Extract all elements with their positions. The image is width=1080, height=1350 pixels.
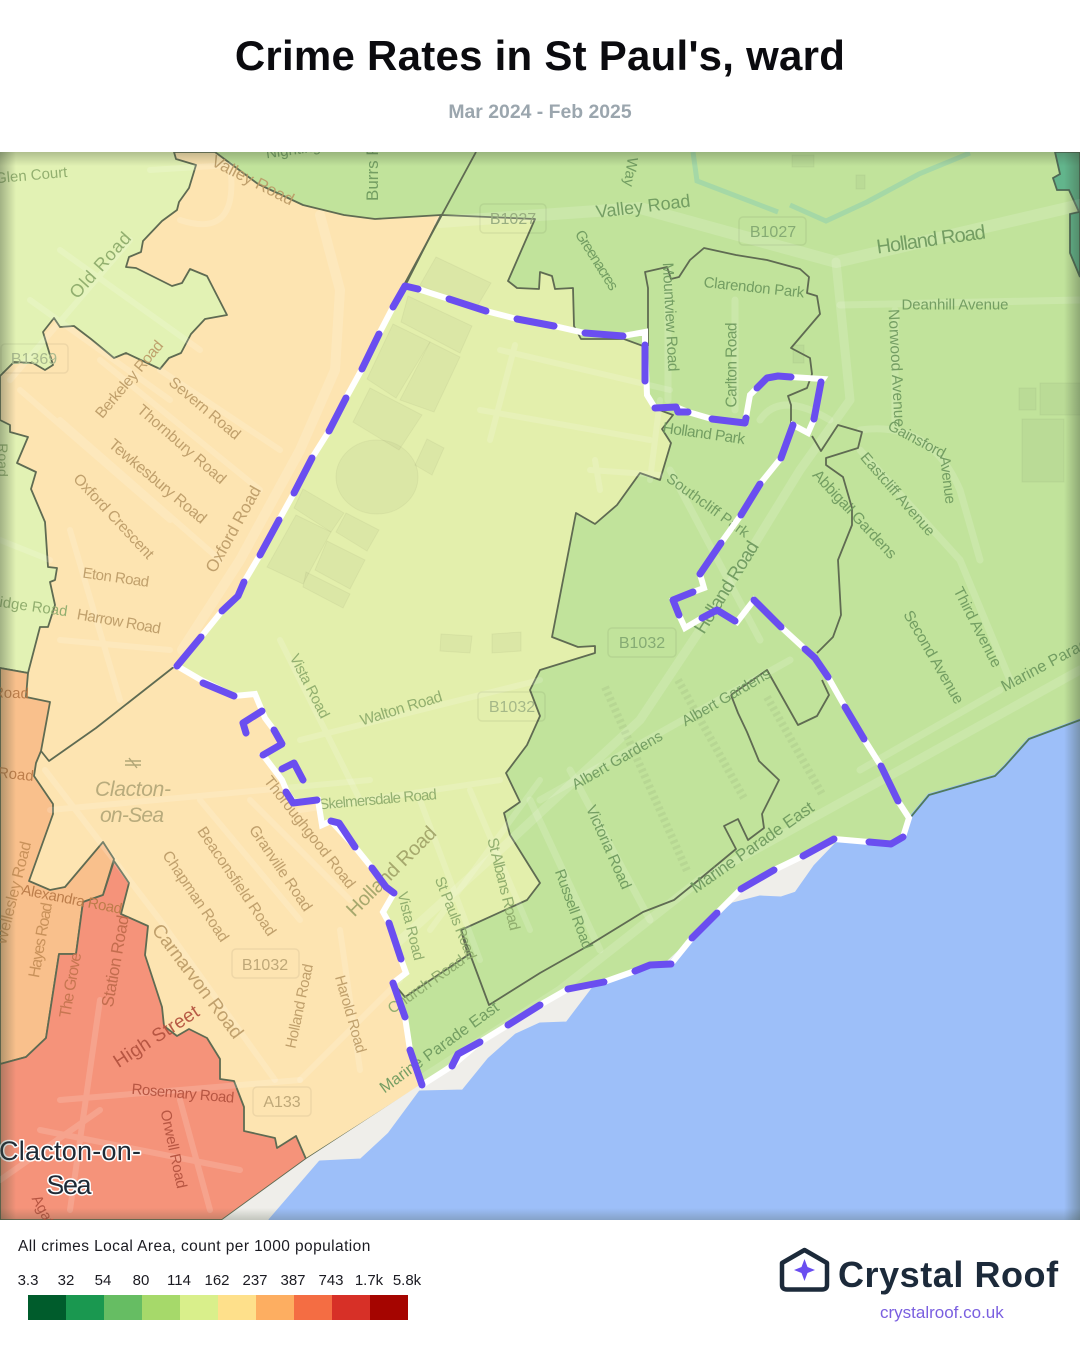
street labels: orange and red areas: Hayes Road	[26, 901, 56, 979]
street labels: ward, pale green area: St Albans Road	[483, 836, 523, 932]
boundary lines between neighbourhoods	[41, 152, 1080, 1005]
legend scale numbers: 54	[95, 1272, 111, 1289]
street labels: east, green area: Holland Road	[875, 221, 987, 259]
wordmark: Crystal Roof	[838, 1254, 1059, 1295]
street labels: orange and red areas: High Street	[110, 1001, 204, 1072]
street labels: ward, pale green area: Church Road	[385, 952, 468, 1018]
road number shields: B1032	[619, 635, 665, 652]
street labels: cream area	[70, 152, 369, 1055]
road number shields: B1027	[750, 224, 796, 241]
street labels: orange and red areas: The Grove	[57, 951, 85, 1019]
legend scale numbers: 1.7k	[355, 1272, 383, 1289]
legend scale numbers: 114	[167, 1272, 191, 1289]
road number shields: B1369	[11, 351, 57, 368]
road number shields: A133	[263, 1094, 301, 1111]
street labels: ward, pale green area	[0, 164, 523, 1018]
website: crystalroof.co.uk	[880, 1303, 1004, 1322]
street labels: east, green area: Deanhill Avenue	[902, 296, 1008, 313]
street labels: cream area: Eton Road	[82, 565, 150, 591]
street labels: east, green area: Holland Park	[662, 420, 746, 448]
legend title: All crimes Local Area, count per 1000 population	[18, 1238, 371, 1255]
street labels: ward, pale green area: Holland Road	[342, 822, 441, 921]
road number shields: B1027	[490, 211, 536, 228]
street labels: east, green area: Albert Gardens	[679, 665, 774, 730]
area: cream central-west band	[0, 152, 441, 1220]
street labels: cream area: Harrow Road	[76, 606, 162, 638]
area: red town centre	[0, 861, 306, 1220]
roads	[0, 165, 1080, 1210]
street labels: east, green area: Greenacres	[571, 227, 622, 294]
buildings	[267, 155, 1080, 653]
street labels: cream area: Oxford Road	[202, 483, 265, 576]
legend scale numbers: 3.3	[18, 1272, 38, 1289]
legend	[18, 1238, 422, 1320]
street labels: east, green area: Albert Gardens	[569, 728, 666, 794]
street labels: east, green area: Holland Road	[690, 538, 764, 638]
street labels: east, green area: Carlton Road	[723, 322, 740, 408]
street labels: cream area: Thoroughgood Road	[260, 773, 358, 892]
legend scale numbers: 32	[58, 1272, 74, 1289]
legend scale numbers: 162	[204, 1272, 230, 1289]
legend scale numbers: 5.8k	[393, 1272, 421, 1289]
street labels: cream area: Thornbury Road	[134, 402, 229, 488]
street labels: east, green area: Norwood Avenue	[885, 309, 908, 427]
street labels: east, green area: Clarendon Park	[703, 274, 806, 302]
street labels: east, green area: Victoria Road	[582, 803, 634, 892]
street labels: cream area: Harold Road	[331, 973, 369, 1055]
street labels: orange and red areas: Rosemary Road	[131, 1081, 235, 1107]
railway lines	[605, 680, 822, 873]
subtitle: date range: Mar 2024 - Feb 2025	[448, 101, 632, 123]
area: orange west	[0, 668, 114, 1064]
map panel	[0, 152, 1080, 1220]
place label: Clacton-on-Sea: Sea	[46, 1170, 92, 1200]
street labels: ward, pale green area: Old Road	[65, 228, 135, 302]
river	[693, 152, 970, 221]
street labels: east, green area: Russell Road	[551, 867, 596, 952]
road number shields	[1, 204, 806, 1116]
icon: house with star	[780, 1248, 830, 1292]
street labels: east, green area	[265, 115, 1080, 1097]
area: pale green west	[0, 152, 240, 700]
legend scale numbers: 387	[280, 1272, 306, 1289]
legend colour ramp	[28, 1295, 408, 1320]
street labels: cream area: Valley Road	[208, 152, 297, 209]
icon: railway station	[125, 758, 141, 768]
street labels: cream area: Holland Road	[282, 962, 317, 1050]
street labels: east, green area: Marine Parade East	[377, 999, 503, 1097]
street labels: orange and red areas: Alexandra Road	[20, 882, 124, 918]
edge shading	[0, 152, 1080, 1220]
street labels: cream area: Carnarvon Road	[147, 920, 247, 1043]
area: light yellow-green central ward	[177, 215, 673, 997]
street labels: cream area: Clacton-	[95, 778, 171, 801]
street labels: east, green area: Southcliff Park	[663, 470, 753, 542]
street labels: east, green area: Third Avenue	[950, 584, 1005, 670]
place label: Clacton-on-Sea: Clacton-on-	[0, 1136, 141, 1166]
street labels: cream area: Tewkesbury Road	[105, 436, 209, 528]
street labels: cream area: Granville Road	[245, 822, 315, 915]
street labels: east, green area: Second Avenue	[900, 608, 967, 707]
street labels: orange and red areas: Station Road	[98, 914, 133, 1009]
area: dark green north-east corner	[1053, 152, 1080, 277]
street labels: orange and red areas	[0, 684, 235, 1270]
street labels: cream area: Severn Road	[165, 374, 244, 444]
street labels: ward, pale green area: St Pauls Road	[431, 874, 480, 962]
street labels: cream area: Oxford Crescent	[70, 471, 158, 563]
legend scale numbers: 80	[133, 1272, 149, 1289]
street labels: cream area: Beaconsfield Road	[193, 824, 279, 939]
street labels: east, green area: Eastcliff Avenue	[857, 449, 938, 540]
logo: Crystal Roof	[780, 1248, 1059, 1322]
road number shields: B1032	[489, 699, 535, 716]
street labels: east, green area: Marine Parade East	[687, 798, 818, 897]
street labels: east, green area: Mountview Road	[659, 262, 681, 372]
street labels: ward, pale green area: Vista Road	[394, 890, 427, 962]
street labels: east, green area: Way	[620, 156, 641, 188]
street labels: east, green area: Abbigail Gardens	[809, 467, 900, 563]
title: Crime Rates in St Paul's, ward	[235, 32, 845, 79]
place label: Clacton-on-Sea	[0, 1136, 141, 1200]
street labels: east, green area: Valley Road	[595, 191, 691, 222]
road number shields: B1032	[242, 957, 288, 974]
ward boundary: white outline	[177, 286, 909, 1085]
street labels: ward, pale green area: Vista Road	[286, 651, 333, 721]
street labels: cream area: Chapman Road	[159, 848, 232, 945]
beach	[222, 842, 838, 1220]
street labels: ward, pale green area: Skelmersdale Road	[319, 786, 438, 813]
street labels: orange and red areas: Orwell Road	[157, 1108, 190, 1190]
street labels: east, green area: Gainsford	[885, 417, 948, 462]
street labels: ward, pale green area: Walton Road	[358, 688, 444, 729]
area: base green (lowest crime band on the east side)	[0, 152, 1080, 1220]
legend scale numbers: 237	[242, 1272, 268, 1289]
sea	[270, 720, 1080, 1220]
legend scale numbers	[18, 1272, 422, 1289]
street labels: cream area: on-Sea	[100, 804, 164, 827]
street labels: east, green area: Avenue	[936, 455, 959, 505]
legend scale numbers: 743	[318, 1272, 344, 1289]
ward boundary: purple dashes	[177, 286, 903, 1085]
street labels: cream area: Berkeley Road	[92, 337, 167, 422]
